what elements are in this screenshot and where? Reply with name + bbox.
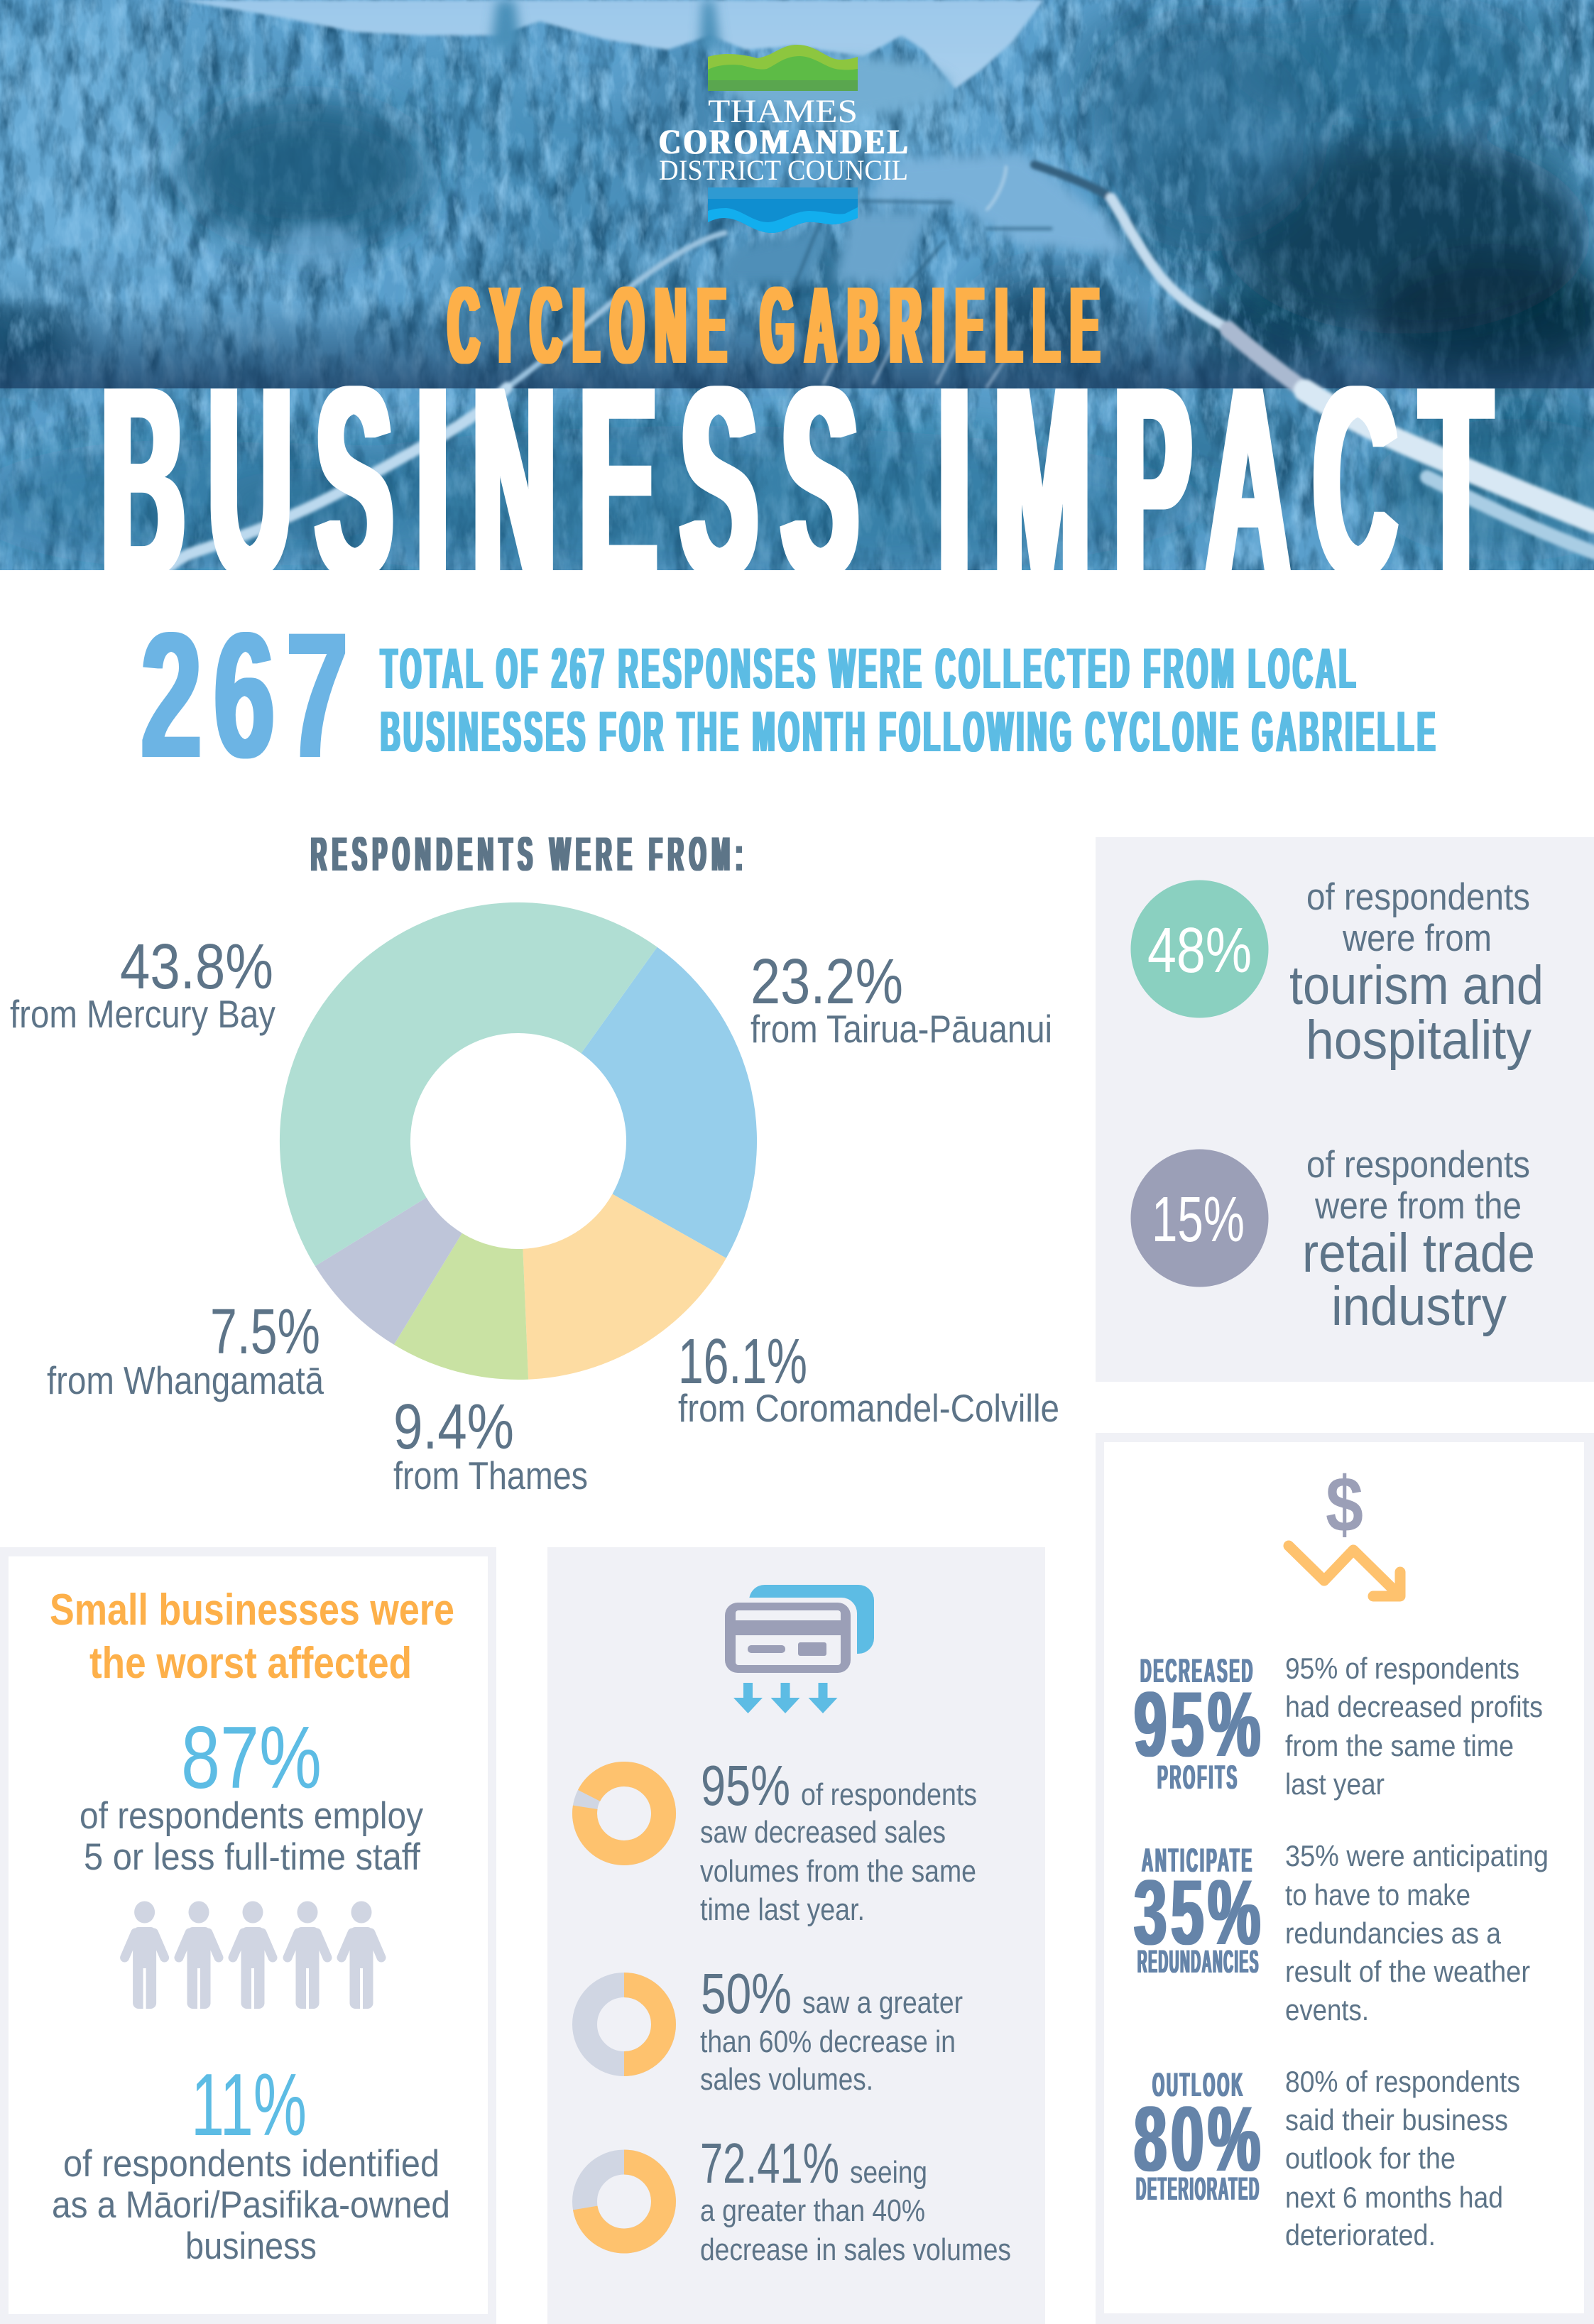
text: 72.41% seeing: seeing — [850, 2155, 927, 2190]
stat: 11%: as a Māori/Pasifika-owned — [52, 2184, 450, 2226]
stat: 11%: of respondents identified — [63, 2143, 440, 2185]
donut: 95% decreased sales — [585, 1774, 664, 1853]
stat block: outlook 80% deteriorated: OUTLOOK — [1152, 2066, 1245, 2103]
text: 50% saw a greater — [700, 1962, 963, 2097]
stat block: decreased 95% profits: PROFITS — [1157, 1758, 1239, 1796]
donut label: Mercury Bay: 43.8% — [120, 932, 273, 1003]
stat block: anticipate 35% redundancies: 35% — [1134, 1860, 1265, 1964]
stat block: outlook 80% deteriorated — [1134, 2066, 1265, 2207]
foliage mottling — [0, 0, 1594, 570]
logo wordmark: DISTRICT COUNCIL — [659, 154, 908, 186]
stat circle: 15%: 15% — [1152, 1184, 1245, 1255]
stat block: anticipate 35% redundancies — [1134, 1841, 1265, 1980]
text: 50% saw a greater: 50% — [701, 1962, 792, 2025]
donut label: Mercury Bay — [10, 932, 275, 1036]
text: retail trade industry: retail trade — [1302, 1223, 1535, 1284]
text: outlook: said their business — [1285, 2103, 1508, 2137]
heading: small businesses — [50, 1586, 454, 1688]
text: RESPONDENTS WERE FROM: — [311, 827, 748, 881]
text: decreased profits: 95% of respondents — [1285, 1652, 1519, 1685]
stat circle: 48% — [1130, 880, 1268, 1018]
panel: small businesses — [0, 1547, 496, 2324]
donut label: Coromandel-Colville: from Coromandel-Colville — [678, 1386, 1059, 1430]
text: outlook: deteriorated. — [1285, 2218, 1436, 2252]
stat: 267 responses — [141, 596, 1439, 795]
heading: small businesses: Small businesses were — [50, 1586, 454, 1635]
text: 95% of respondents: of respondents — [801, 1777, 977, 1812]
text: redundancies: to have to make — [1285, 1878, 1470, 1911]
text: tourism and hospitality: tourism and — [1289, 955, 1544, 1016]
text: redundancies: 35% were anticipating — [1285, 1839, 1549, 1872]
stat: 11% — [52, 2056, 450, 2267]
panel: industries — [1096, 837, 1594, 1382]
responses description — [381, 637, 1439, 764]
text: decreased profits: from the same time — [1285, 1729, 1514, 1762]
text: outlook: next 6 months had — [1285, 2181, 1503, 2214]
guardrails — [160, 165, 1594, 575]
panel: profits, redundancies and outlook — [1096, 1433, 1594, 2324]
text: retail trade industry: were from the — [1314, 1185, 1522, 1227]
donut label: Mercury Bay: from Mercury Bay — [10, 992, 275, 1036]
text: tourism and hospitality: hospitality — [1306, 1010, 1532, 1071]
text: tourism and hospitality — [1289, 876, 1544, 1071]
text: 50% saw a greater: than 60% decrease in — [700, 2024, 956, 2059]
text: 95% of respondents — [700, 1754, 977, 1927]
text: outlook: outlook for the — [1285, 2142, 1456, 2175]
stat block: decreased 95% profits: 95% — [1134, 1672, 1265, 1776]
donut chart: respondent location — [280, 902, 757, 1380]
donut label: Thames — [393, 1392, 588, 1497]
stat block: anticipate 35% redundancies: ANTICIPATE — [1142, 1841, 1254, 1879]
text: redundancies: result of the weather — [1285, 1955, 1530, 1988]
stat: 11%: 11% — [191, 2056, 307, 2154]
donut: 50% greater than 60% decrease — [585, 1985, 663, 2063]
text: retail trade industry — [1302, 1144, 1535, 1337]
donut: 72.41% greater than 40% decrease — [585, 2162, 663, 2241]
logo wordmark: COROMANDEL — [659, 121, 910, 161]
heading: small businesses: the worst affected — [89, 1639, 412, 1688]
donut label: Tairua-Pauanui: from Tairua-Pāuanui — [750, 1007, 1052, 1051]
icon: dollar with falling arrow — [1289, 1461, 1400, 1596]
donut label: Whangamata — [47, 1297, 324, 1402]
text: outlook — [1285, 2065, 1520, 2252]
logo wordmark — [659, 93, 910, 186]
text: outlook: 80% of respondents — [1285, 2065, 1520, 2098]
stat: 87%: of respondents employ — [80, 1795, 423, 1837]
stat: 87% — [80, 1709, 423, 1878]
stat circle: 15% — [1130, 1149, 1268, 1287]
stat block: outlook 80% deteriorated: 80% — [1134, 2087, 1265, 2191]
text: 50% saw a greater: sales volumes. — [700, 2062, 873, 2097]
tree fern highlights — [280, 222, 359, 268]
stat circle: 48%: 48% — [1147, 915, 1252, 986]
text: 95% of respondents: saw decreased sales — [700, 1815, 946, 1850]
text: 72.41% seeing — [700, 2132, 1011, 2267]
sky — [178, 0, 1044, 89]
text: 95% of respondents: volumes from the same — [700, 1854, 976, 1889]
logo: Thames Coromandel District Council — [659, 45, 910, 233]
road surface — [863, 153, 1129, 256]
text: redundancies: redundancies as a — [1285, 1916, 1502, 1950]
text: retail trade industry: of respondents — [1306, 1144, 1530, 1186]
text: 72.41% seeing: 72.41% — [700, 2132, 839, 2195]
text: redundancies — [1285, 1839, 1549, 2026]
donut label: Coromandel-Colville — [678, 1326, 1059, 1430]
icon: five people — [125, 1902, 381, 2009]
big number 267: 267 — [141, 596, 359, 795]
donut label: Whangamata: 7.5% — [210, 1297, 320, 1368]
panel: profits, redundancies and outlook: DETERIORATED — [1136, 2171, 1260, 2207]
stat: 87%: 5 or less full-time staff — [84, 1836, 420, 1878]
panel: profits, redundancies and outlook: REDUNDANCIES — [1137, 1943, 1260, 1980]
donut label: Coromandel-Colville: 16.1% — [678, 1326, 807, 1397]
text: decreased profits — [1285, 1652, 1543, 1801]
text: 95% of respondents: 95% — [701, 1754, 790, 1817]
stat: 87%: 87% — [181, 1709, 322, 1807]
donut label: Thames: from Thames — [393, 1453, 588, 1497]
text: 50% saw a greater: saw a greater — [802, 1985, 963, 2020]
logo wordmark: THAMES — [708, 93, 858, 130]
donut label: Thames: 9.4% — [393, 1392, 514, 1463]
logo green hills — [708, 45, 858, 91]
text: redundancies: events. — [1285, 1993, 1369, 2026]
stat block: decreased 95% profits: DECREASED — [1140, 1652, 1255, 1689]
text: tourism and hospitality: of respondents — [1306, 876, 1530, 918]
text: retail trade industry: industry — [1331, 1276, 1507, 1337]
text: 72.41% seeing: a greater than 40% — [700, 2193, 925, 2228]
icon: credit cards with down arrows — [714, 1585, 874, 1713]
text: decreased profits: had decreased profits — [1285, 1690, 1543, 1723]
stat: 11%: business — [185, 2225, 317, 2267]
stat block: decreased 95% profits — [1134, 1652, 1265, 1796]
text: 72.41% seeing: decrease in sales volumes — [700, 2232, 1011, 2267]
shadow masses over foliage — [0, 0, 1594, 582]
logo blue water — [708, 187, 858, 233]
panel: sales volumes — [547, 1547, 1045, 2324]
text: 95% of respondents: time last year. — [700, 1892, 865, 1927]
icon: dollar with falling arrow: $ — [1326, 1461, 1363, 1549]
text: tourism and hospitality: were from — [1342, 917, 1492, 959]
donut label: Whangamata: from Whangamatā — [47, 1358, 324, 1402]
text: decreased profits: last year — [1285, 1767, 1385, 1801]
donut label: Tairua-Pauanui — [750, 946, 1052, 1051]
donut label: Tairua-Pauanui: 23.2% — [750, 946, 903, 1018]
hero photo: damaged road through bush, blue tint — [0, 0, 1594, 582]
